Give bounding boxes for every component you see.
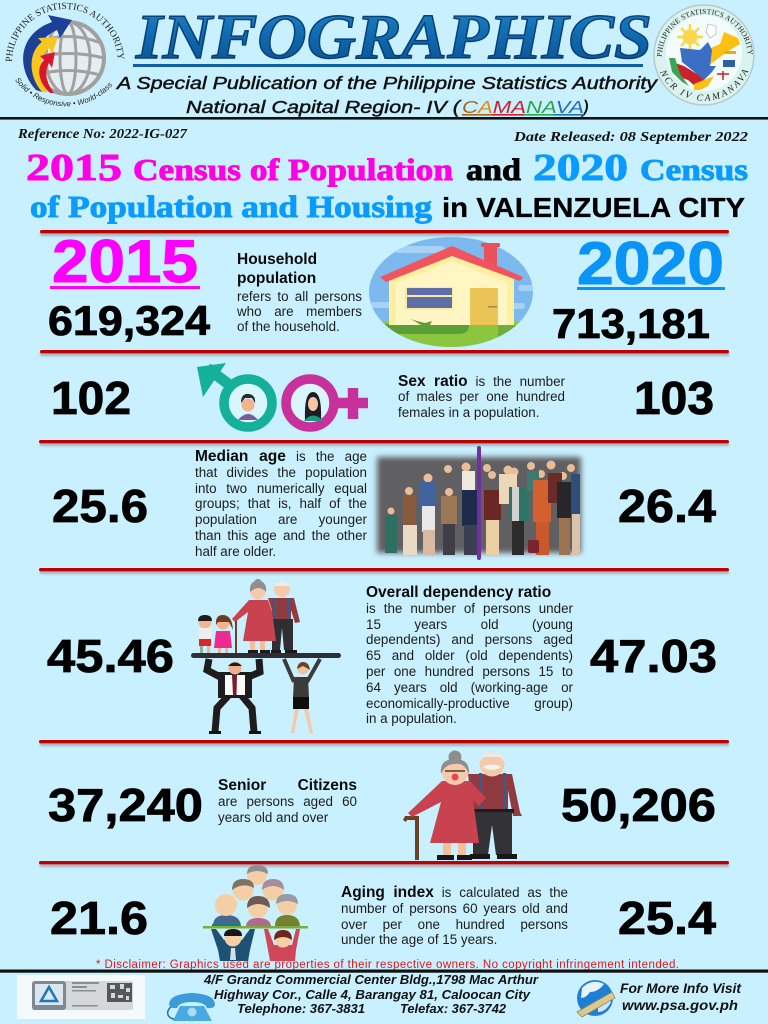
household population 2015: 619,324 [48,297,211,344]
main heading: Census of Population [133,152,453,187]
sex ratio 2015: 102 [51,372,131,424]
illustration: elders carried by adults [203,865,308,961]
text: aging index: over per one hundred persons [341,917,568,932]
text: overall dependency ratio: 15 years old (young [366,617,573,632]
certification badge [17,975,145,1019]
illustration: elderly couple [403,750,522,860]
text: senior citizens [218,777,357,825]
photo: crowd of people [377,457,581,555]
subtitle: regional office: ) [581,97,589,117]
woman lifting [284,659,320,733]
icon: house [369,237,538,347]
text: senior citizens: years old and over [218,810,328,825]
aging index 2020: 25.4 [618,892,716,944]
text: overall dependency ratio: 64 years old (working-age or [366,680,573,695]
main heading [26,147,748,224]
elderly couple [232,579,300,653]
text: overall dependency ratio: 65 and older (old dependents) [366,648,573,663]
illustration: workers carrying dependents [191,579,341,734]
subtitle: regional office: CAMANAVA [462,97,584,117]
household population 2020: 713,181 [552,300,710,347]
text: household population: of the household. [237,319,340,334]
text: senior citizens: are persons aged 60 [218,794,357,809]
main heading: of Population and Housing [30,189,433,224]
address: 4/F Grandz Commercial Center Bldg.,1798 Mac Arthur [203,972,539,987]
main heading: 2020 [533,147,628,189]
year heading: 2015: 2015 [52,228,198,295]
text: aging index [341,884,568,947]
text: overall dependency ratio: economically-productive group) [366,696,573,711]
footer rule [0,970,768,973]
subtitle: regional office [186,97,589,117]
dependency ratio 2020: 47.03 [590,630,717,682]
text: median age: than this age and the other [195,528,367,543]
text: sex ratio: Sex ratio is the number [398,373,565,390]
text: household population: refers to all persons [237,289,362,304]
senior citizens 2020: 50,206 [561,779,716,831]
dependency ratio 2015: 45.46 [47,630,174,682]
text: overall dependency ratio [366,584,573,726]
median age 2020: 26.4 [618,480,716,532]
text: senior citizens: Senior Citizens [218,777,357,794]
text: median age: groups; that is, half of the [195,496,367,511]
website info [620,980,742,1013]
logo: NCR IV CAMANAVA [653,4,755,106]
woman in red [264,929,300,961]
main heading: Census [640,152,748,187]
divider: purple line [477,446,481,560]
website info: www.psa.gov.ph [622,997,738,1013]
subtitle: regional office: National Capital Region- IV ( [186,97,463,117]
median age 2015: 25.6 [52,480,148,532]
logo: Philippine Statistics Authority [6,2,124,106]
text: aging index: Aging index is calculated as the [341,884,568,901]
address [203,972,539,1016]
title: INFOGRAPHICS: INFOGRAPHICS [135,2,652,72]
reference number: Reference No: 2022-IG-027 [17,126,188,141]
key figures [47,297,717,944]
address: Highway Cor., Calle 4, Barangay 81, Caloocan City [214,987,531,1002]
icon: blue telephone [168,993,215,1021]
text: median age: half are older. [195,544,276,559]
address: Telefax: 367-3742 [400,1001,507,1016]
release date: Date Released: 08 September 2022 [513,130,748,145]
text: overall dependency ratio: per one hundred persons 15 to [366,664,573,679]
beam [191,653,341,658]
logo: NCR IV CAMANAVA: NCR IV CAMANAVA [660,70,748,101]
disclaimer: * Disclaimer: Graphics used are properties of their respective owners. No copyright infringement intended. [96,959,679,971]
man in blue [211,929,255,961]
text: household population [237,251,362,334]
text: household population: population [237,270,316,286]
cane [403,816,419,860]
elder group [213,865,300,926]
text: overall dependency ratio: Overall dependency ratio [366,584,551,601]
text: overall dependency ratio: in a population. [366,711,457,726]
section rules [39,230,729,867]
text: median age [195,448,367,559]
logo: Philippine Statistics Authority: PHILIPPINE STATISTICS AUTHORITY [6,2,124,62]
text: sex ratio [398,373,565,420]
male symbol [197,363,272,427]
text: household population: who are members [237,304,362,319]
year heading: 2020: 2020 [577,230,724,297]
green carrying plank [203,926,308,928]
children [198,615,233,653]
header rule [0,117,768,120]
text: median age: into two numerically equal [195,481,367,496]
text: median age: Median age is the age [195,448,367,465]
grandfather [468,752,522,859]
text: household population: Household [237,251,317,268]
text: overall dependency ratio: is the number of persons under [366,601,573,616]
subtitle: publication line: A Special Publication of the Philippine Statistics Authority [116,73,659,93]
text: sex ratio: females in a population. [398,405,539,420]
female symbol [286,379,368,427]
man lifting [207,659,261,734]
senior citizens 2015: 37,240 [48,779,203,831]
website info: For More Info Visit [620,980,742,996]
text: aging index: under the age of 15 years. [341,932,497,947]
grandmother [408,750,486,860]
main heading: 2015 [26,147,122,189]
icon: web globe [577,980,615,1017]
logo: NCR IV CAMANAVA: PHILIPPINE STATISTICS AUTHORITY [656,8,753,57]
icon: male and female symbols [197,363,368,427]
address: Telephone: 367-3831 [237,1001,365,1016]
text: aging index: number of persons 60 years old and [341,901,568,916]
main heading: and [466,152,521,187]
text: median age: that divides the population [195,465,367,480]
main heading: in VALENZUELA CITY [442,192,745,223]
text: median age: population are younger [195,512,367,527]
sex ratio 2020: 103 [634,372,714,424]
logo: Philippine Statistics Authority: Solid • Responsive • World-class [16,78,112,106]
text: sex ratio: of males per one hundred [398,389,565,404]
aging index 2015: 21.6 [50,892,148,944]
text: overall dependency ratio: dependents) and persons aged [366,632,573,647]
